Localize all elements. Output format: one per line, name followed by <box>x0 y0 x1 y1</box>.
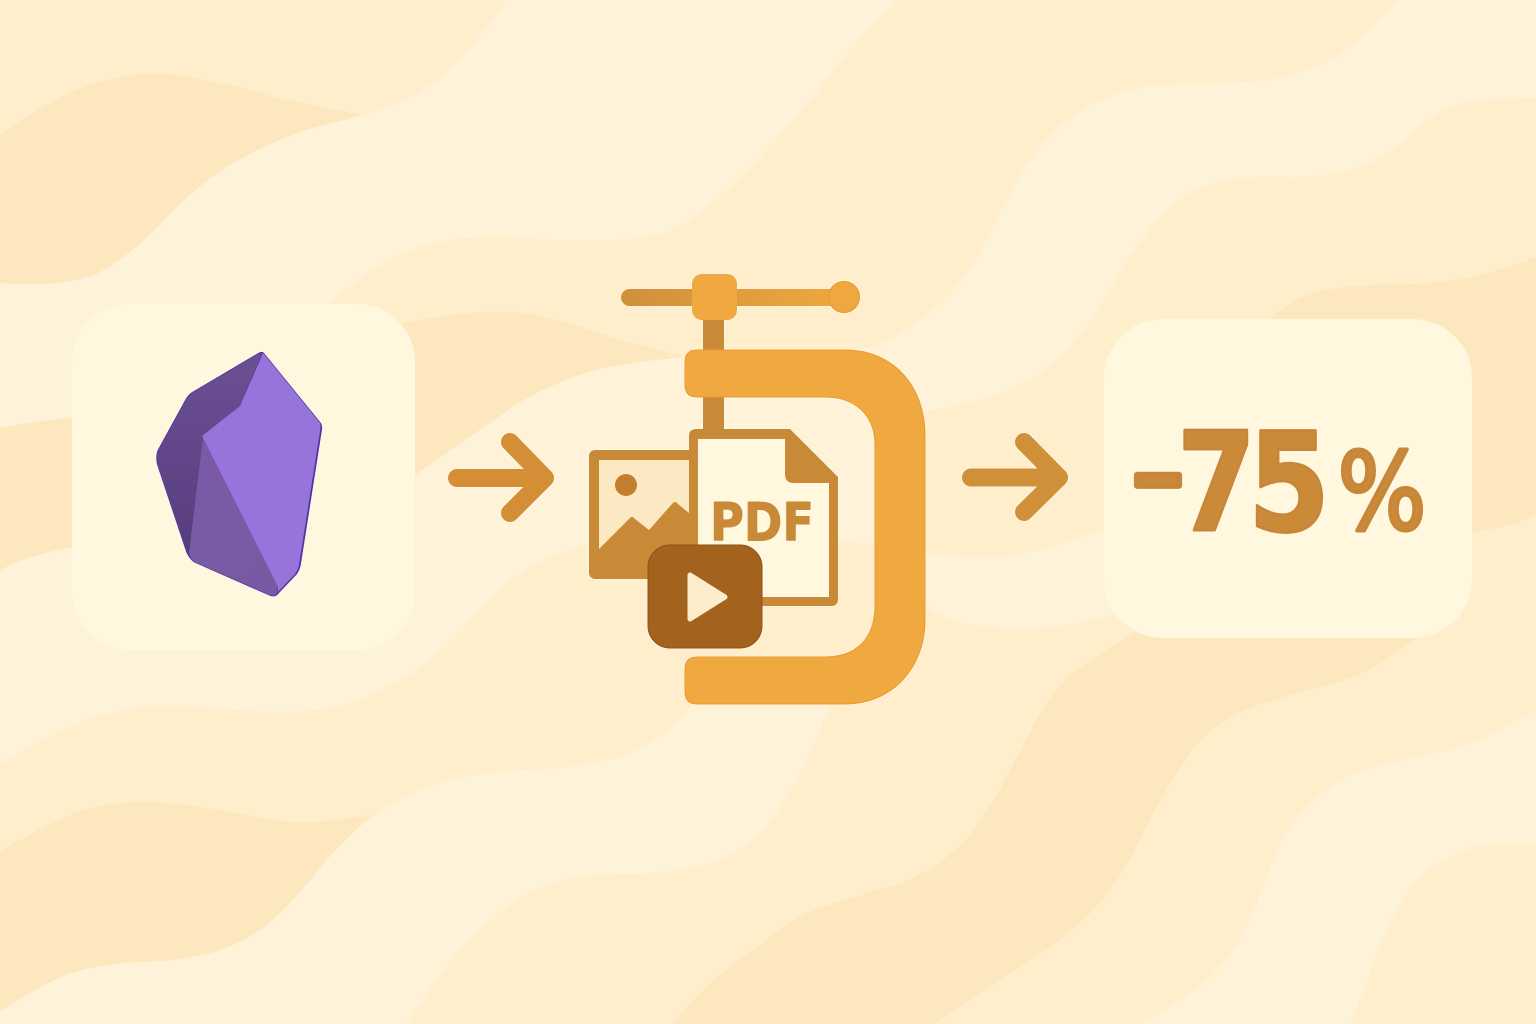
icon: video play tile <box>648 545 762 648</box>
arrow: vault to compression <box>457 442 545 513</box>
icon: clamp compressing files <box>589 274 925 704</box>
icon: PDF document <box>689 429 838 606</box>
clamp screw cap <box>692 274 737 320</box>
result value: -75%: - <box>1130 390 1186 549</box>
panel: result <box>1104 319 1472 638</box>
panel: source vault <box>72 304 415 650</box>
clamp screw <box>703 318 724 432</box>
clamp handle bar <box>621 289 841 306</box>
result value: -75% <box>1130 390 1426 564</box>
clamp handle ball <box>828 282 860 312</box>
clamp body <box>685 350 925 704</box>
PDF label: PDF <box>710 492 814 554</box>
icon: image file <box>589 450 701 579</box>
arrow: compression to result <box>971 442 1059 512</box>
icon: purple crystal logo <box>157 353 321 596</box>
result value: -75%: 5 <box>1248 404 1330 564</box>
result value: -75%: % <box>1338 431 1426 555</box>
result value: -75%: 7 <box>1177 404 1256 563</box>
